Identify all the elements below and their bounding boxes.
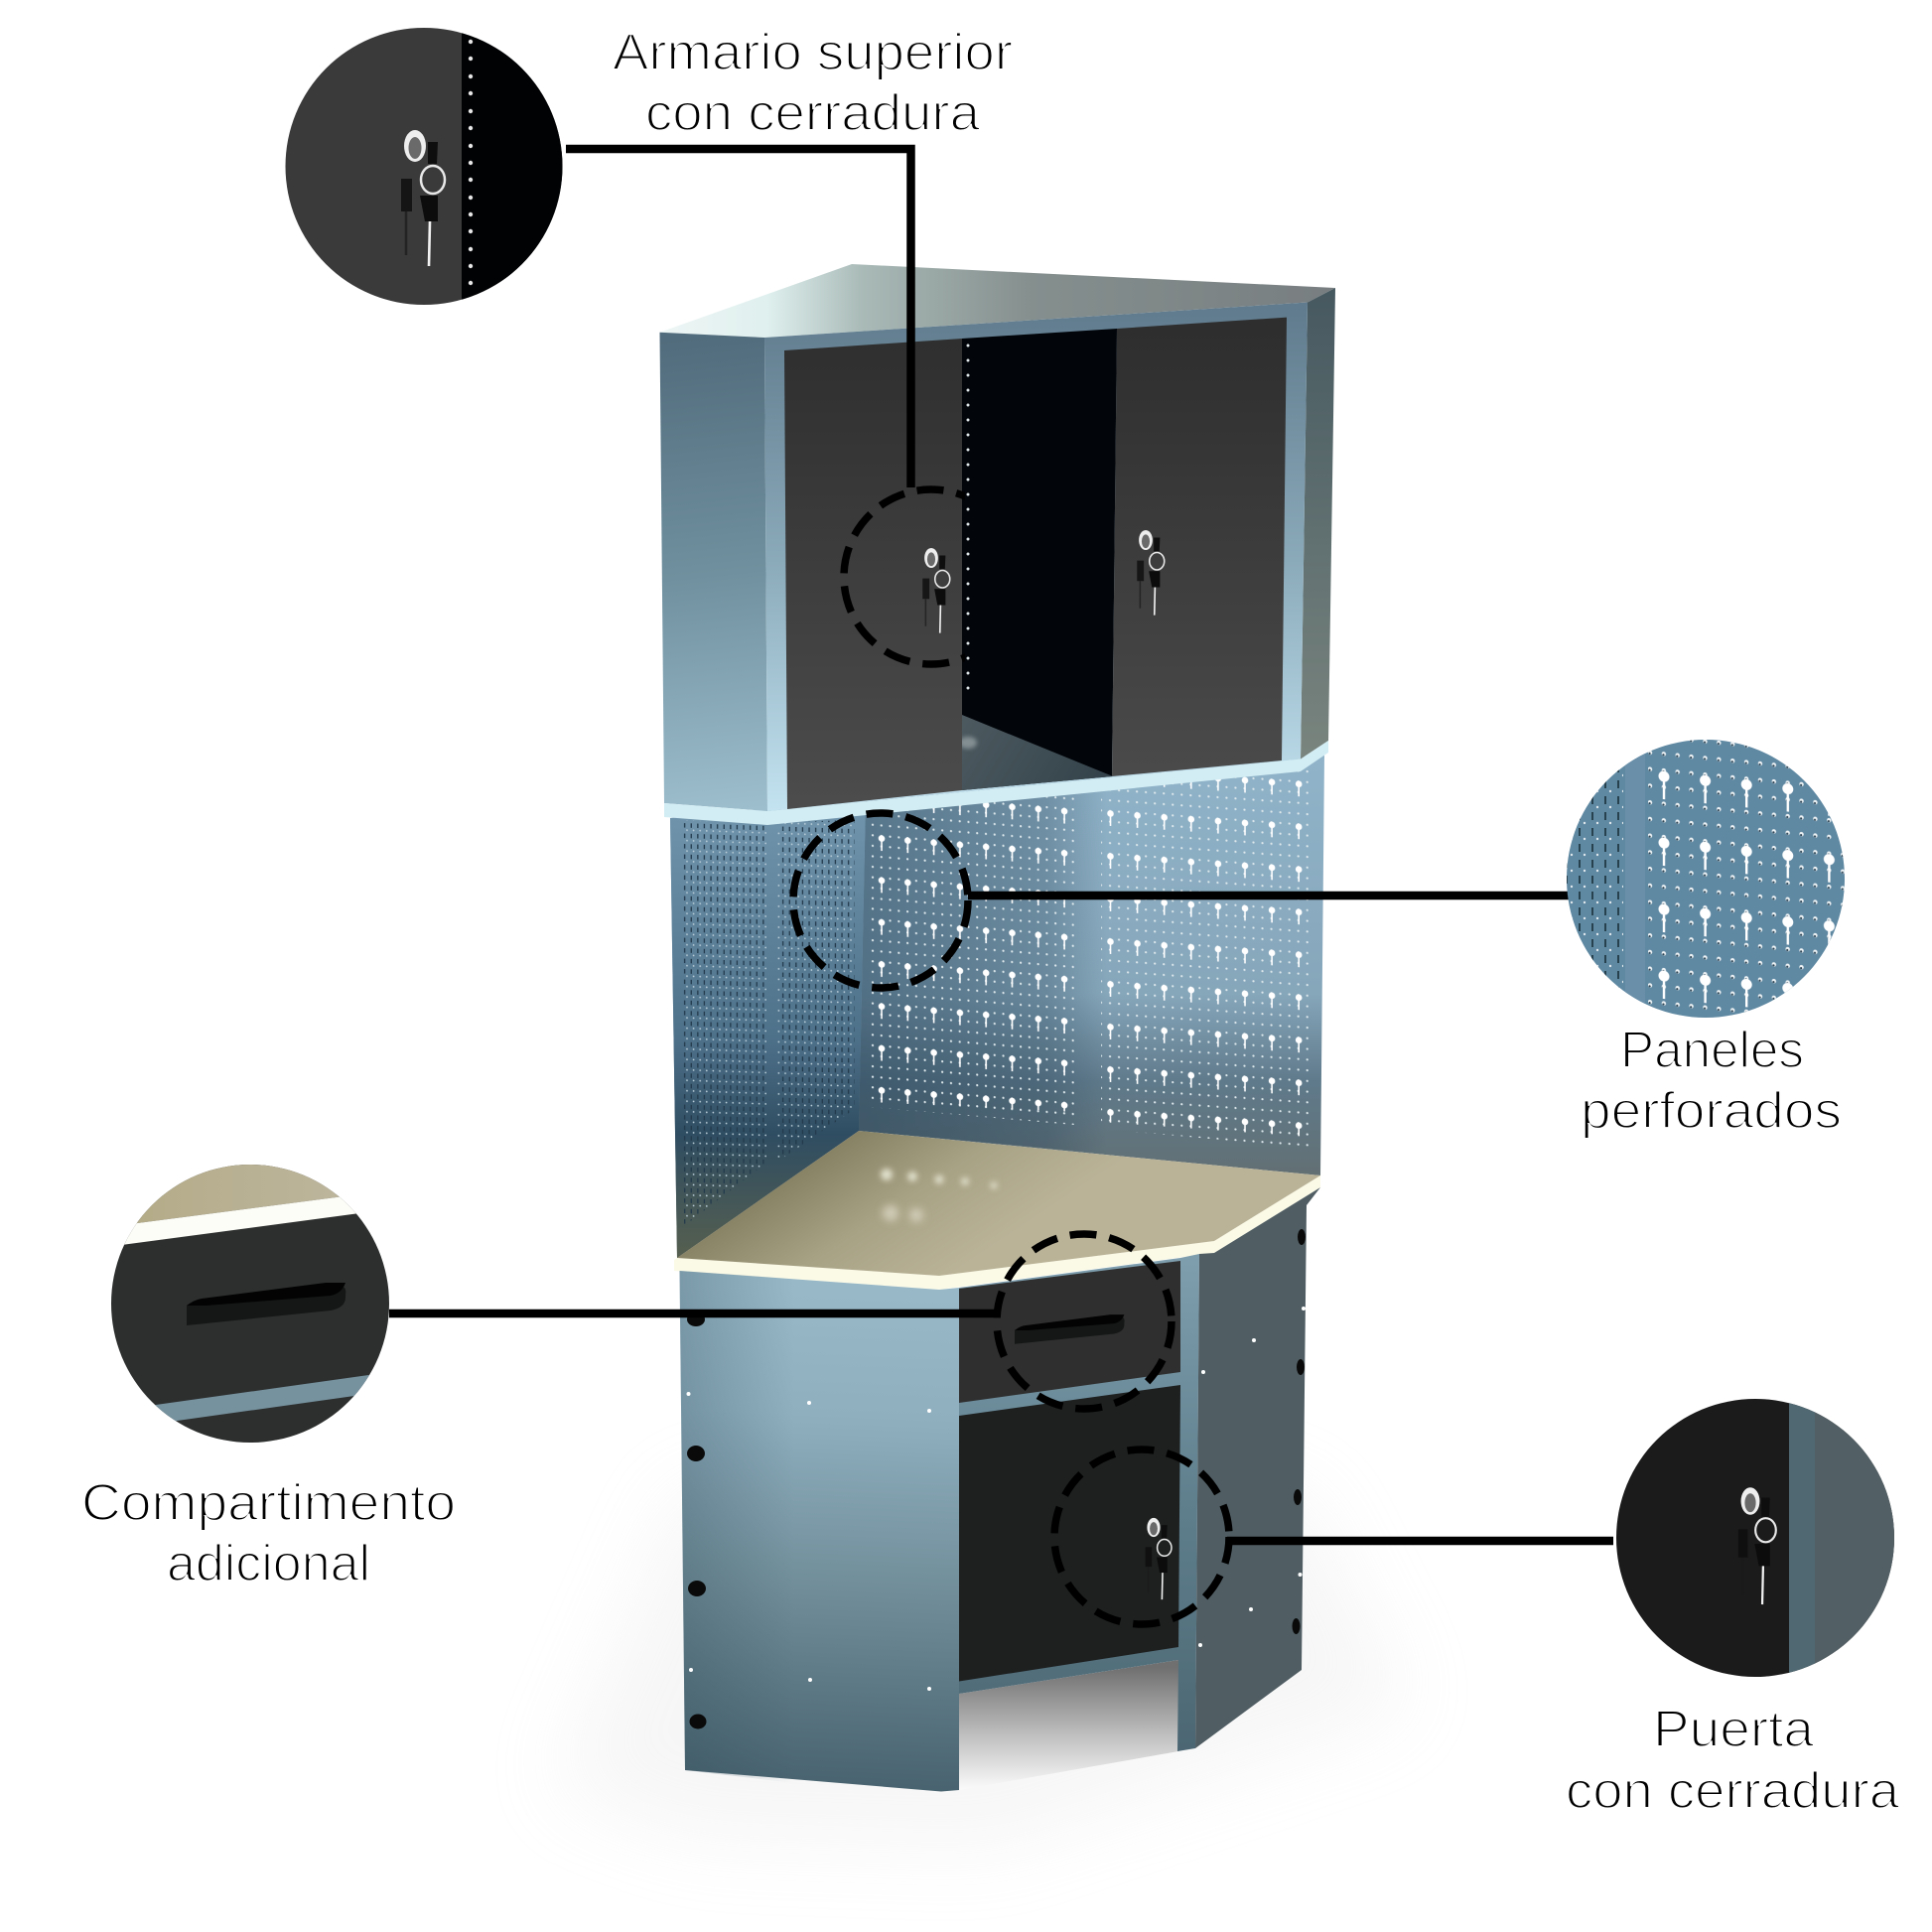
upper cabinet — [659, 264, 1335, 825]
front frame — [764, 302, 1308, 811]
lower door — [959, 1385, 1180, 1682]
label: Puerta con cerradura — [1566, 1701, 1899, 1820]
label: Armario superior con cerradura — [613, 24, 1013, 142]
left side — [659, 333, 767, 811]
callout lines — [389, 149, 1613, 1541]
interior — [959, 329, 1117, 790]
perforated back panels — [670, 755, 1324, 1258]
left door — [784, 339, 962, 809]
bottom strip — [664, 741, 1328, 825]
worktop — [674, 1131, 1320, 1290]
drawer — [959, 1261, 1180, 1403]
cabinet top — [659, 264, 1335, 338]
label: Compartimento adicional: Compartimento — [81, 1474, 456, 1532]
label: Compartimento adicional — [81, 1474, 456, 1592]
label: Armario superior con cerradura: Armario superior — [613, 24, 1013, 81]
label: Paneles perforados — [1581, 1022, 1842, 1140]
left leg panel — [679, 1271, 959, 1791]
label: Compartimento adicional: adicional — [167, 1535, 370, 1592]
label: Paneles perforados: perforados — [1581, 1082, 1842, 1140]
label: Paneles perforados: Paneles — [1620, 1022, 1804, 1079]
right door — [1112, 318, 1287, 776]
base cabinet — [679, 1187, 1320, 1791]
right side — [1301, 288, 1335, 759]
zoom circle: perforated panels — [1559, 735, 1853, 1023]
zoom circle: door lock — [1613, 1395, 1901, 1683]
floor shadow — [556, 1489, 1410, 1847]
right side panel — [1195, 1187, 1320, 1748]
product: corner workbench cabinet — [659, 264, 1335, 1791]
label: Armario superior con cerradura: con cerradura — [645, 84, 980, 142]
zoom circle: upper cabinet lock — [286, 28, 562, 305]
zoom circle: drawer compartment — [99, 1162, 397, 1445]
label: Puerta con cerradura: con cerradura — [1566, 1762, 1899, 1820]
label: Puerta con cerradura: Puerta — [1653, 1701, 1814, 1758]
dashed highlight circles — [793, 489, 1229, 1624]
